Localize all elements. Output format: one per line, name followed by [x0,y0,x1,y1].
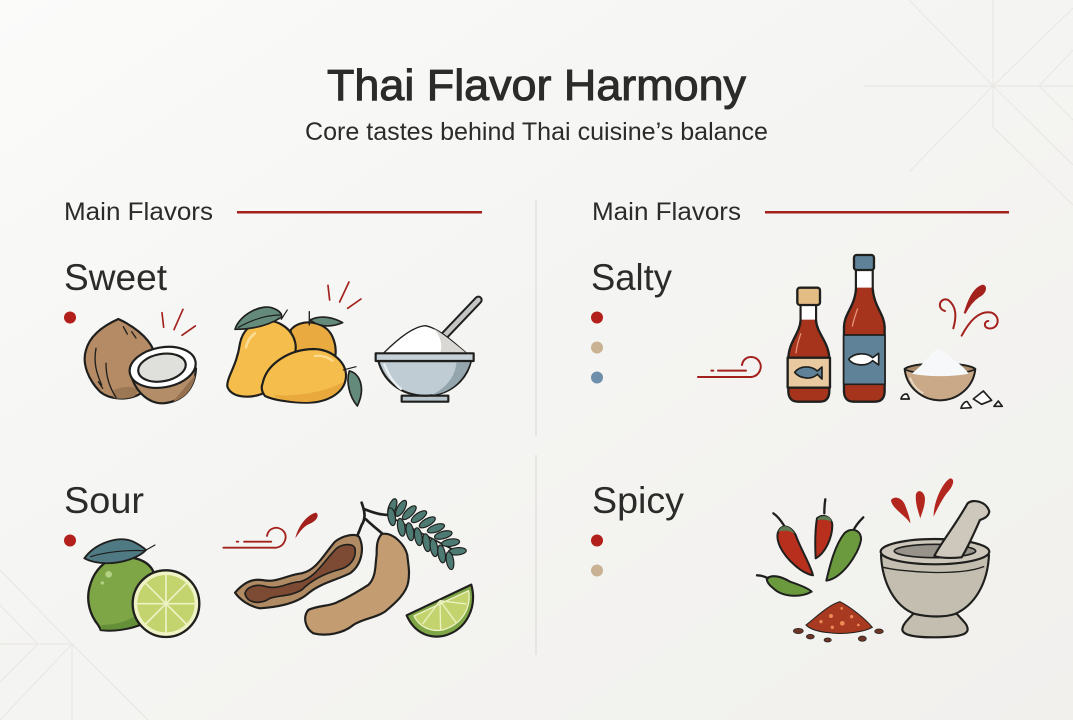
heading: spicy: Spicy [592,480,685,521]
panel: sour [64,480,473,637]
heading: main flavors left: Main Flavors [64,198,213,226]
heading: main flavors right: Main Flavors [592,198,741,226]
icon: mangoes [227,282,361,406]
bullet: sweet [64,312,76,324]
icon: heat drops [891,478,953,523]
heading: salty: Salty [591,257,672,298]
panel: sweet [64,257,478,406]
title: Thai Flavor Harmony [327,61,746,110]
panel: salty [591,255,1002,408]
center divider [535,200,537,655]
panel: spicy [591,478,989,642]
icon: splash [940,286,998,336]
icon: coconut [85,309,199,403]
icon: chilies [757,499,863,596]
icon: chili flakes [793,602,883,642]
subtitle: Core tastes behind Thai cuisine’s balance [305,118,768,146]
heading: sweet: Sweet [64,257,168,298]
icon: fish sauce bottle tall [844,255,885,402]
icon: tamarind branch [235,503,409,635]
heading: sour: Sour [64,480,144,521]
bullets: salty [591,312,603,384]
icon: lime [84,539,199,637]
icon: fish sauce bottle small [788,288,830,402]
icon: lime wedge [407,585,473,637]
icon: salt bowl [901,349,1002,408]
icon: tamarind leaves [386,498,467,570]
bullets: spicy [591,534,603,576]
icon: wind and drop [223,513,318,548]
icon: mortar and pestle [881,501,989,637]
icon: wind swirl [698,357,761,377]
bullet: sour [64,534,76,546]
icon: sugar bowl [376,300,478,402]
